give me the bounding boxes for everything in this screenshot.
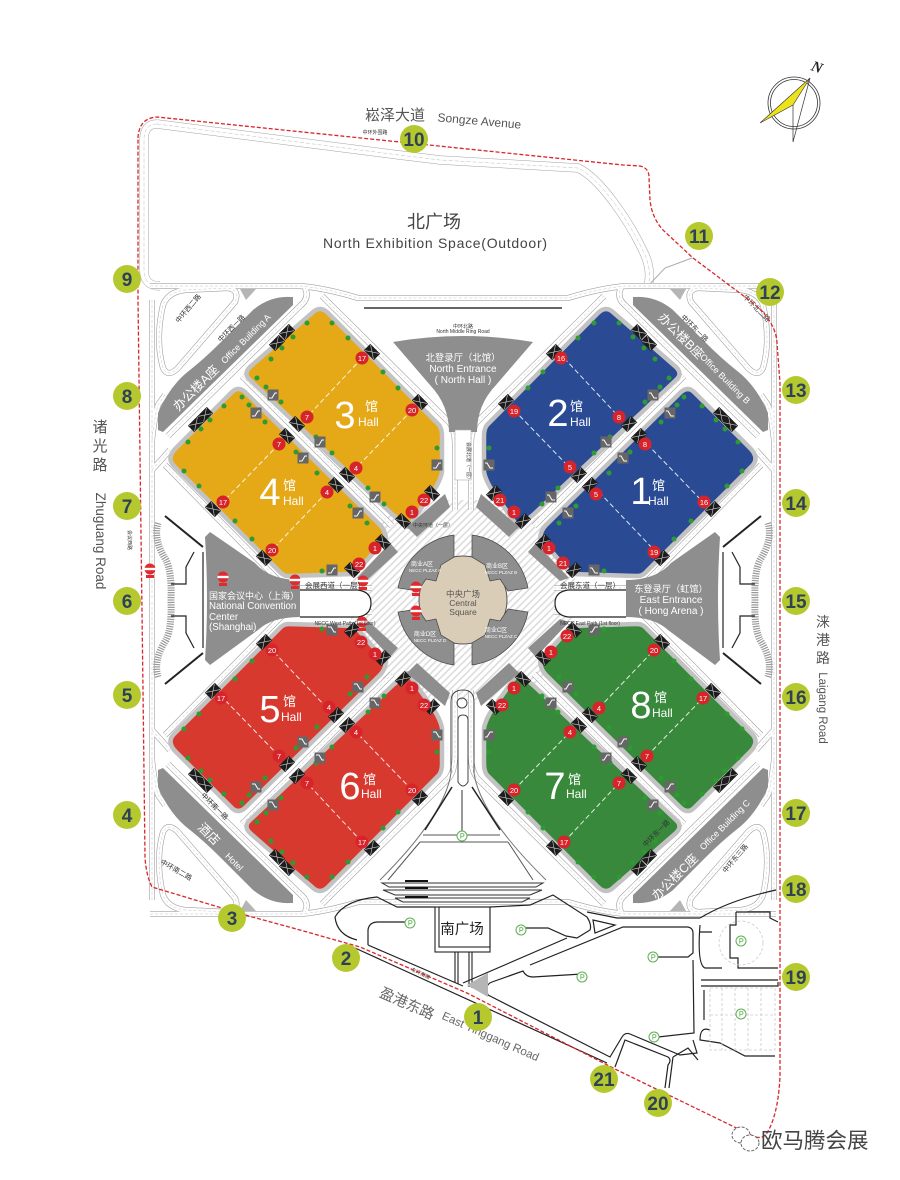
- road name: yinggang: East Yinggang Road: [440, 1010, 541, 1064]
- road name: zhuguang: 路: [92, 457, 108, 474]
- hall 5 markers: 1: [373, 650, 377, 659]
- hall labels: Hall: [283, 494, 304, 508]
- quadrant: halls 3 and 4 with office A: [150, 286, 463, 600]
- watermark text: 欧马腾会展: [761, 1129, 869, 1153]
- north exhibition road loop: [144, 124, 692, 308]
- hall labels: 馆: [365, 399, 378, 414]
- road name: yinggang: 盈港东路: [377, 984, 437, 1024]
- entry gate numbers: 6: [122, 592, 132, 613]
- hall 2 markers: 8: [617, 413, 621, 422]
- south plaza building: 南广场: [440, 921, 484, 938]
- hall labels: Hall: [570, 415, 591, 429]
- entry gate numbers: 18: [785, 880, 807, 901]
- building labels: [170, 310, 752, 903]
- panel: north entrance: [393, 336, 533, 432]
- hall 7 markers: 1: [512, 684, 516, 693]
- hall labels: 馆: [652, 478, 665, 493]
- entry gate numbers: 3: [227, 909, 237, 930]
- hall 3 markers: 1: [410, 508, 414, 517]
- road name: laigang: [816, 614, 830, 744]
- panel: north entrance: ( North Hall ): [435, 375, 491, 386]
- hall 1 markers: 1: [547, 544, 551, 553]
- hall 3 markers: 22: [420, 496, 428, 505]
- central square: 商业D区: [414, 630, 436, 638]
- hall 4 markers: [216, 438, 382, 570]
- hall 8 markers: 7: [645, 752, 649, 761]
- small road labels: 东环南路: [410, 966, 431, 981]
- small road labels: [126, 129, 772, 981]
- hall labels: 馆: [283, 694, 296, 709]
- hall 5 markers: 4: [327, 703, 331, 712]
- north exhibition space label: 北广场: [407, 212, 461, 232]
- entry gate numbers: 1: [473, 1008, 484, 1029]
- small road labels: 中环北二路: [741, 293, 772, 324]
- central square: 中央广场: [446, 589, 480, 599]
- hall 2 markers: 19: [510, 407, 518, 416]
- south road network: [335, 890, 778, 1088]
- hall labels: 4: [259, 472, 281, 514]
- compass: [760, 58, 826, 142]
- central square: Central: [449, 598, 477, 608]
- hall 5 markers: [214, 636, 382, 762]
- hall 7 markers: 20: [510, 786, 518, 795]
- hall labels: 3: [334, 395, 356, 437]
- small road labels: North Middle Ring Road: [436, 329, 490, 335]
- hall 7 markers: 22: [498, 701, 506, 710]
- central square: 商业A区: [411, 560, 433, 568]
- central hatched plaza: [351, 500, 575, 700]
- entry gate numbers: 19: [785, 968, 807, 989]
- hall 3 markers: 20: [408, 406, 416, 415]
- entry gate numbers: 9: [122, 270, 132, 291]
- small road labels: 中环东三路: [720, 842, 750, 875]
- hall 3 markers: 4: [354, 464, 358, 473]
- south bus lanes: [382, 881, 543, 902]
- entry gate numbers: 15: [785, 592, 807, 613]
- small road labels: 中环外围路: [362, 129, 388, 136]
- metro icons: [144, 564, 422, 631]
- road name: zhuguang: 光: [92, 438, 108, 455]
- hall 4 markers: 22: [355, 560, 363, 569]
- hall labels: Hall: [652, 706, 673, 720]
- entry gate numbers: 2: [341, 949, 351, 970]
- hall 4 markers: 20: [268, 546, 276, 555]
- building labels: 办公楼B座: [655, 310, 707, 362]
- panel: national convention center: 国家会议中心（上海）: [209, 590, 299, 601]
- building labels: 办公楼A座: [170, 362, 222, 414]
- panel: national convention center: [205, 532, 300, 665]
- hall 1 markers: 21: [559, 559, 567, 568]
- compass: N: [808, 58, 826, 78]
- central square: [398, 535, 528, 665]
- entry gate numbers: 11: [689, 227, 709, 248]
- hall 6 markers: 22: [420, 701, 428, 710]
- central square: NECC PLZAZ B: [485, 570, 517, 575]
- small road labels: 中环东一路: [679, 313, 710, 344]
- building labels: 办公楼C座: [649, 851, 701, 903]
- entry gate numbers: 8: [122, 387, 132, 408]
- entry gate numbers: 17: [785, 804, 807, 825]
- panel: north entrance: 北登录厅（北馆）: [425, 352, 501, 363]
- panel: national convention center: National Convention: [209, 601, 296, 612]
- plaza B: [472, 535, 528, 591]
- panel: east entrance: East Entrance: [640, 595, 703, 606]
- entry gate numbers: 14: [785, 494, 807, 515]
- parking icons: [405, 918, 746, 1042]
- hall 3 markers: 7: [305, 413, 309, 422]
- hall labels: Hall: [281, 710, 302, 724]
- entry gate numbers: 12: [759, 283, 781, 304]
- hall labels: 2: [547, 393, 569, 435]
- hall 2 markers: 1: [512, 508, 516, 517]
- hall 7 markers: 7: [617, 779, 621, 788]
- building labels: Office Building C: [698, 797, 752, 852]
- small road labels: 中环南一路: [199, 791, 230, 822]
- hall 6 markers: 7: [305, 779, 309, 788]
- building labels: Hotel: [223, 851, 245, 873]
- entry gate numbers: 13: [785, 381, 807, 402]
- road names: north: Songze Avenue: [437, 110, 522, 132]
- central square: Square: [449, 607, 477, 617]
- plaza D: [398, 609, 454, 665]
- hall labels: 馆: [570, 399, 583, 414]
- panel: north entrance: North Entrance: [429, 364, 497, 375]
- south plaza building: [435, 907, 490, 988]
- hall 4 markers: 4: [325, 488, 329, 497]
- small road labels: 中央环道（一层）: [413, 522, 453, 529]
- entry gate numbers: 4: [122, 806, 133, 827]
- building labels: Office Building A: [219, 312, 273, 366]
- small road labels: 中环西二路: [173, 292, 203, 325]
- hall 4 markers: 1: [373, 544, 377, 553]
- hall labels: 馆: [283, 478, 296, 493]
- quadrant: halls 7 and 8 with office C: [463, 600, 776, 914]
- hall 5 markers: 17: [217, 694, 225, 703]
- small road labels: NECC East Path (1st floor): [560, 621, 620, 627]
- panel: east entrance: [626, 532, 720, 665]
- hall 1 markers: 5: [594, 490, 598, 499]
- hall labels: 馆: [654, 690, 667, 705]
- entry gate numbers: 20: [647, 1094, 669, 1115]
- small road labels: 会展东道（一层）: [560, 580, 620, 590]
- road name: laigang: 港: [816, 632, 830, 648]
- small road labels: 中环东一路: [641, 818, 672, 849]
- hall 6 markers: [300, 682, 430, 848]
- central square: 商业B区: [486, 562, 508, 570]
- hall 3 markers: [300, 352, 430, 518]
- building labels: Office Building B: [698, 352, 752, 406]
- road name: zhuguang: [92, 419, 108, 589]
- small road labels: NECC West Path (1st floor): [314, 621, 376, 627]
- hall labels: Hall: [566, 787, 587, 801]
- central square: NECC PLZAZ A: [409, 568, 441, 573]
- small road labels: 中环西一路: [216, 313, 247, 344]
- hall 5 markers: 7: [277, 752, 281, 761]
- small road labels: 中环北路: [453, 323, 473, 330]
- north exhibition space label: North Exhibition Space(Outdoor): [323, 235, 547, 251]
- road name: zhuguang: 诸: [92, 419, 108, 436]
- hall 4 markers: 7: [277, 440, 281, 449]
- small road labels: 中环南二路: [159, 857, 194, 882]
- hall 1 markers: [542, 438, 710, 570]
- road name: laigang: Laigang Road: [816, 672, 828, 744]
- hall 1 markers: 19: [650, 548, 658, 557]
- hall 6 markers: 4: [354, 728, 358, 737]
- parking icon: south stem: [457, 831, 467, 841]
- panel: national convention center: (Shanghai): [209, 622, 256, 633]
- road name: laigang: 涞: [816, 614, 830, 630]
- west and east boulevards: [300, 430, 626, 617]
- hall labels: 馆: [363, 772, 376, 787]
- entry gate numbers: [113, 125, 810, 1117]
- hall 3 markers: 17: [358, 354, 366, 363]
- north exhibition space label: [323, 212, 547, 251]
- south junction hatches: [467, 973, 488, 997]
- quadrant: halls 2 and 1 with office B: [463, 286, 776, 600]
- hall 8 markers: 20: [650, 646, 658, 655]
- south capsule road: [380, 690, 546, 880]
- hall 7 markers: 4: [568, 728, 572, 737]
- quadrant: halls 6 and 5 with hotel: [150, 600, 463, 914]
- plaza C: [472, 609, 528, 665]
- road name: laigang: 路: [816, 650, 830, 666]
- building labels: 酒店: [195, 820, 223, 848]
- road names: north: 崧泽大道: [365, 107, 425, 124]
- site boundary: [138, 117, 780, 1137]
- hall 8 markers: 4: [597, 704, 601, 713]
- central square: NECC PLZAZ C: [485, 634, 518, 639]
- hall 8 markers: 17: [699, 694, 707, 703]
- hall 5 markers: 22: [357, 638, 365, 647]
- hall labels: 8: [630, 685, 652, 727]
- entry gate numbers: 7: [122, 497, 132, 518]
- central square: 商业C区: [485, 626, 507, 634]
- panel: east entrance: 东登录厅（虹馆）: [634, 583, 708, 594]
- hall 6 markers: 17: [358, 838, 366, 847]
- entry gate numbers: 21: [593, 1070, 615, 1091]
- hall 6 markers: 20: [408, 786, 416, 795]
- entry gate numbers: 5: [122, 686, 133, 707]
- hall 5 markers: 20: [268, 646, 276, 655]
- hall 1 markers: 16: [700, 498, 708, 507]
- hall labels: Hall: [361, 787, 382, 801]
- hall 4 markers: 17: [219, 498, 227, 507]
- hall 8 markers: [544, 630, 710, 762]
- hall 6 markers: 1: [410, 684, 414, 693]
- hall 1 markers: 8: [643, 440, 647, 449]
- hall 2 markers: 5: [568, 463, 572, 472]
- small road labels: 会议西路: [126, 530, 133, 550]
- hall 2 markers: [494, 352, 626, 518]
- hall 2 markers: 21: [496, 496, 504, 505]
- hall labels: Hall: [648, 494, 669, 508]
- hall labels: Hall: [358, 415, 379, 429]
- hall 7 markers: 17: [560, 838, 568, 847]
- hall labels: [259, 393, 673, 808]
- hall labels: 6: [339, 766, 361, 808]
- south parking lot: [710, 921, 775, 1050]
- panel: national convention center: Center: [209, 612, 239, 623]
- hall labels: 馆: [568, 772, 581, 787]
- hall 8 markers: 1: [549, 648, 553, 657]
- hall 7 markers: [496, 682, 626, 848]
- panel: east entrance: ( Hong Arena ): [638, 606, 704, 617]
- hall labels: 1: [630, 471, 652, 513]
- central square: NECC PLZAZ D: [414, 638, 447, 643]
- wechat watermark icon: [732, 1127, 759, 1151]
- entry gate numbers: 16: [785, 688, 807, 709]
- hall labels: 7: [544, 766, 566, 808]
- plaza A: [398, 535, 454, 591]
- road name: zhuguang: Zhuguang Road: [93, 493, 108, 589]
- road name: yinggang: [377, 984, 541, 1064]
- entry gate numbers: 10: [403, 130, 425, 151]
- hall labels: 5: [259, 689, 281, 731]
- road names: north: [365, 107, 522, 132]
- small road labels: 会展西道（一层）: [305, 580, 365, 590]
- hall 2 markers: 16: [557, 354, 565, 363]
- hall 8 markers: 22: [563, 632, 571, 641]
- small road labels: 会展北道（一层）: [465, 442, 472, 482]
